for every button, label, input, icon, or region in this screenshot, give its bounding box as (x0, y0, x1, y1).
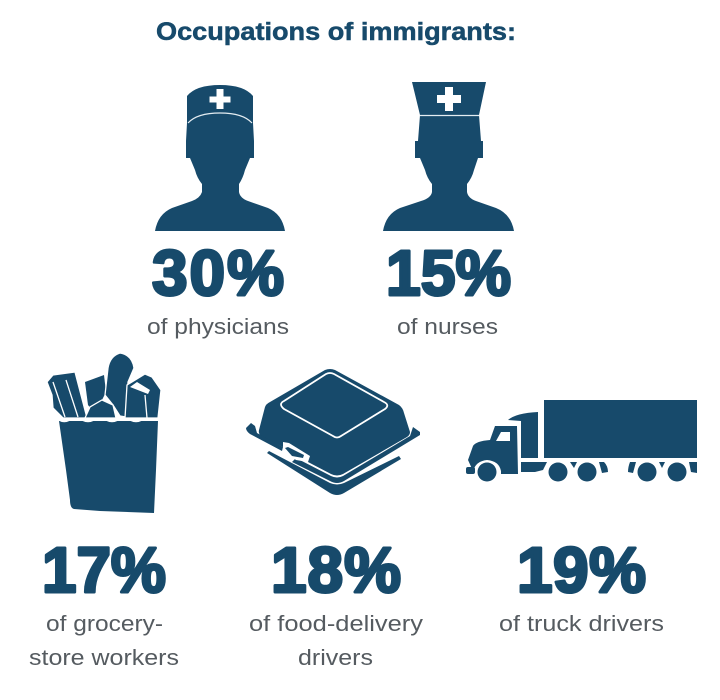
icon: physician (155, 85, 285, 231)
label: of food-delivery drivers: drivers (298, 645, 373, 670)
panel: physicians (147, 85, 289, 339)
stat: 19%: 19% (517, 534, 646, 606)
stat: 30%: 30% (152, 237, 284, 309)
label: of food-delivery drivers (249, 611, 423, 670)
panel: grocery-store workers (29, 353, 179, 670)
stat: 15%: 15% (386, 237, 511, 309)
label: of physicians: of physicians (147, 314, 289, 339)
panel: food-delivery drivers (246, 369, 423, 670)
icon: grocery bag (47, 353, 161, 513)
panel: truck drivers (466, 400, 697, 636)
icon: nurse (383, 82, 514, 231)
label: of grocery-store workers (29, 611, 179, 670)
title: Occupations of immigrants: (156, 18, 516, 46)
label: of grocery-store workers: of grocery- (46, 611, 163, 636)
label: of food-delivery drivers: of food-delivery (249, 611, 423, 636)
label: of grocery-store workers: store workers (29, 645, 179, 670)
stat: 18%: 18% (271, 534, 401, 606)
label: of nurses: of nurses (397, 314, 498, 339)
stat: 17%: 17% (42, 534, 166, 606)
icon: semi truck (466, 400, 697, 482)
panel: nurses (383, 82, 514, 339)
label: of truck drivers: of truck drivers (499, 611, 664, 636)
icon: takeout container (246, 369, 420, 495)
